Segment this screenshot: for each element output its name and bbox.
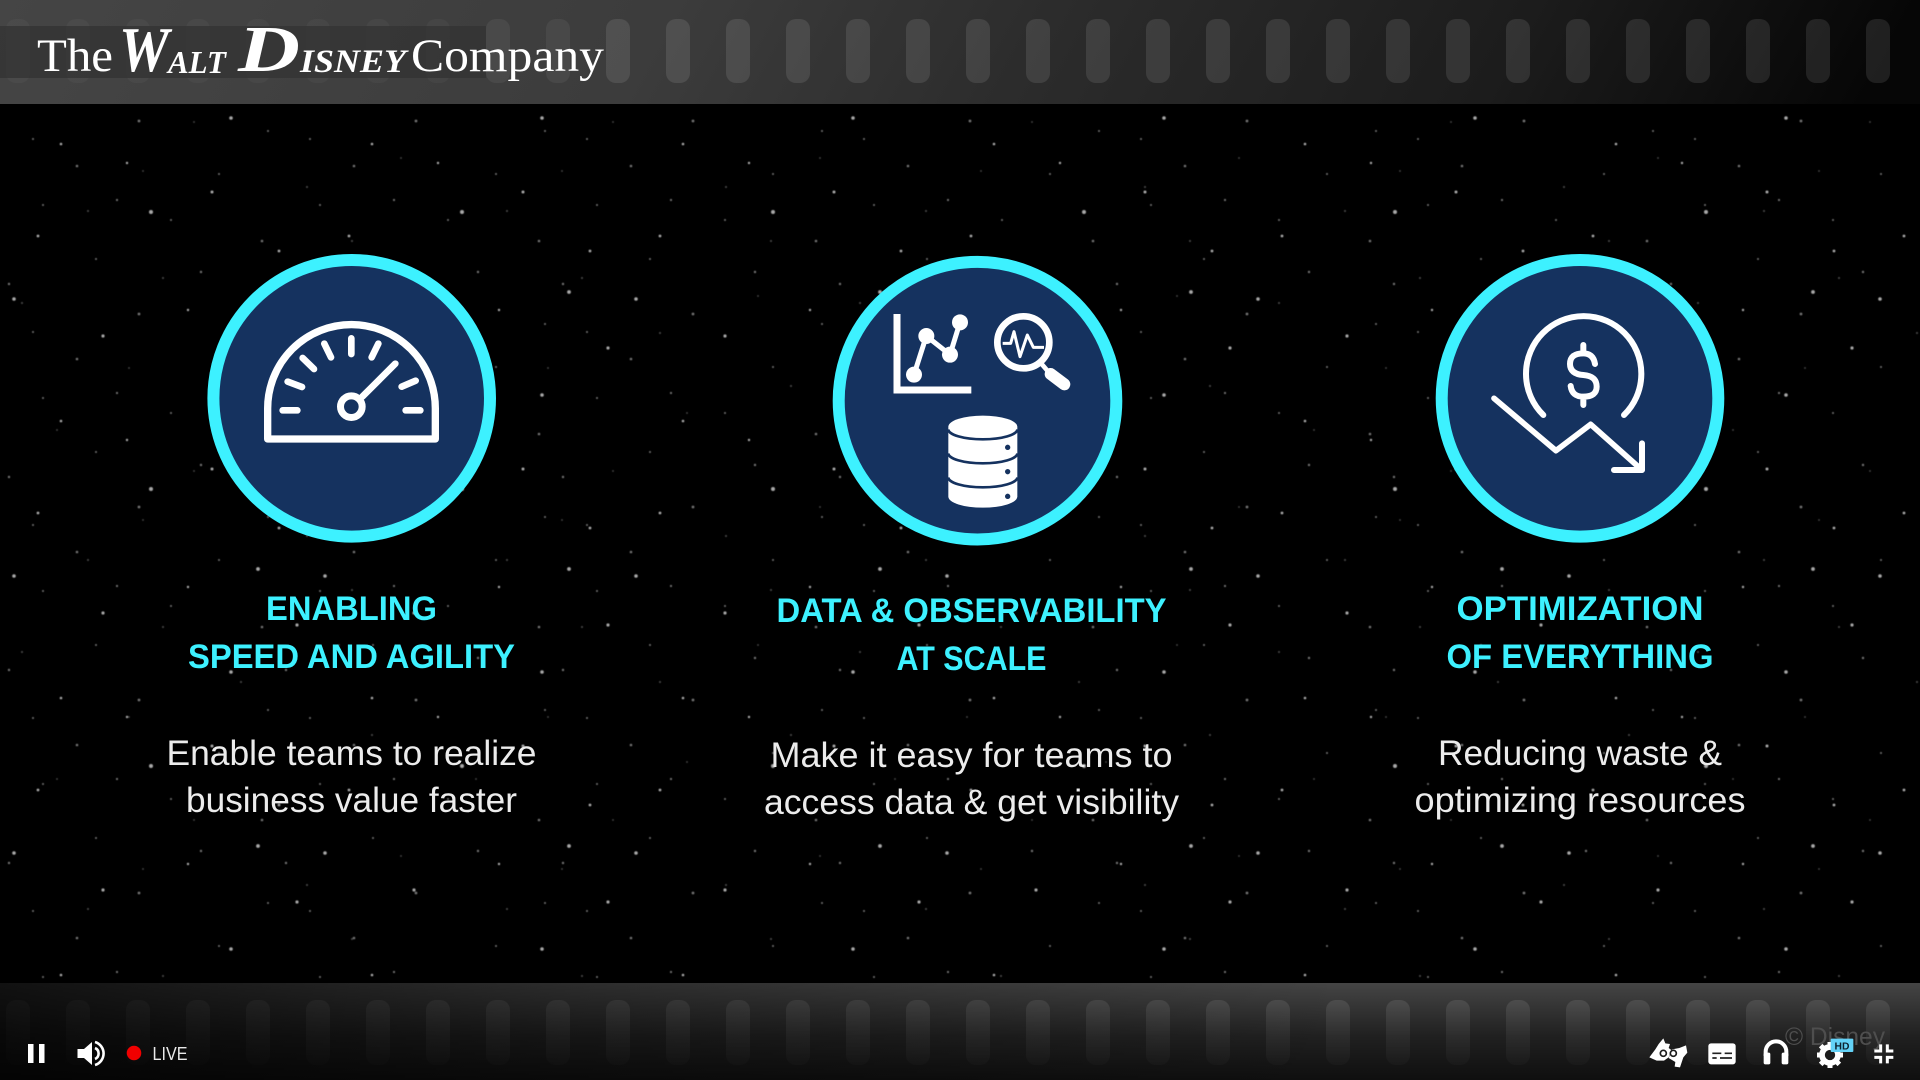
icon: pause bbox=[28, 1044, 44, 1063]
icon: exit fullscreen bbox=[1874, 1044, 1893, 1063]
heading: SPEED AND AGILITY bbox=[188, 638, 515, 676]
icon: falling cost badge bbox=[1442, 260, 1718, 537]
icon: speedometer badge bbox=[213, 260, 490, 537]
icon: settings with HD badge: HD bbox=[1835, 1041, 1850, 1052]
heading: AT SCALE bbox=[896, 640, 1046, 678]
heading bbox=[188, 590, 515, 676]
heading bbox=[776, 592, 1167, 678]
description: optimizing resources bbox=[1414, 781, 1746, 820]
description: Reducing waste & bbox=[1438, 734, 1722, 773]
heading: OF EVERYTHING bbox=[1446, 638, 1714, 676]
panel: enabling speed and agility bbox=[166, 260, 536, 820]
icon: chart, magnifier and database badge bbox=[839, 262, 1116, 540]
description: Enable teams to realize bbox=[166, 734, 536, 773]
description: access data & get visibility bbox=[764, 783, 1180, 822]
icon: audio headphones bbox=[1764, 1041, 1788, 1064]
logo: The Walt Disney Company: D bbox=[237, 13, 300, 86]
heading: ENABLING bbox=[266, 590, 437, 628]
icon: sign language bbox=[1649, 1038, 1687, 1067]
icon: volume bbox=[78, 1042, 104, 1065]
logo: The Walt Disney Company bbox=[37, 13, 605, 86]
logo: The Walt Disney Company: ALT bbox=[166, 44, 227, 80]
description: business value faster bbox=[186, 781, 517, 820]
heading: DATA & OBSERVABILITY bbox=[776, 592, 1167, 630]
copyright watermark: © Disney bbox=[1785, 1023, 1885, 1051]
description bbox=[764, 736, 1180, 822]
logo: The Walt Disney Company: Company bbox=[411, 30, 605, 82]
logo: The Walt Disney Company: The bbox=[37, 30, 113, 82]
live indicator bbox=[127, 1044, 188, 1064]
description bbox=[1414, 734, 1746, 820]
bottom film strip control bar bbox=[0, 983, 1920, 1080]
panel: data and observability at scale bbox=[764, 262, 1180, 822]
panel: optimization of everything bbox=[1414, 260, 1746, 820]
description: Make it easy for teams to bbox=[770, 736, 1172, 775]
top film strip header bbox=[0, 0, 1920, 104]
icon: settings with HD badge bbox=[1817, 1039, 1853, 1068]
logo: The Walt Disney Company: W bbox=[119, 14, 173, 85]
icon: captions bbox=[1708, 1043, 1736, 1064]
heading: OPTIMIZATION bbox=[1456, 590, 1704, 628]
description bbox=[166, 734, 536, 820]
heading bbox=[1446, 590, 1714, 676]
live indicator: LIVE bbox=[152, 1044, 188, 1064]
logo: The Walt Disney Company: ISNEY bbox=[299, 44, 409, 80]
